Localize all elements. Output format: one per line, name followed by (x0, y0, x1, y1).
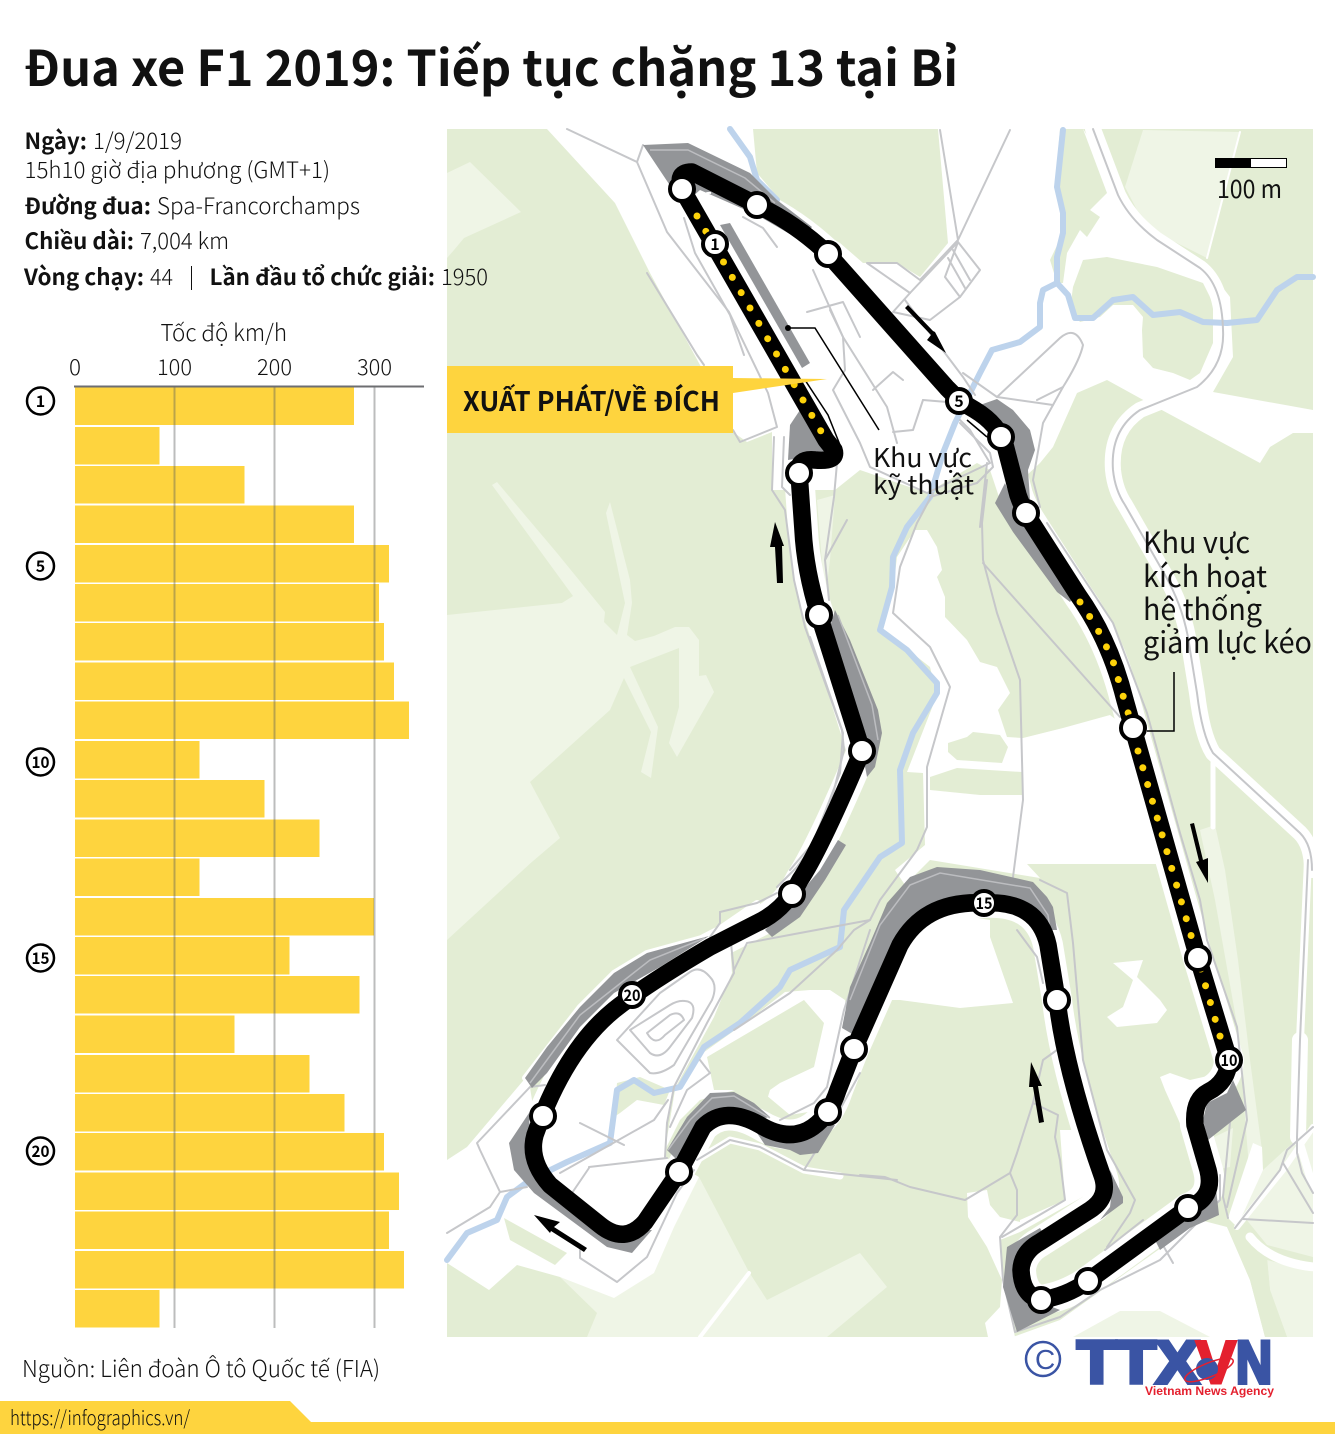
logo: TTXVN: V (1196, 1329, 1236, 1396)
race info: Ngày: (24, 124, 87, 156)
turn markers (531, 177, 1241, 1312)
race info: Đường đua: (24, 189, 151, 221)
title: Đua xe F1 2019: Tiếp tục chặng 13 tại Bỉ (24, 30, 958, 101)
axis ticks: 100 (157, 350, 192, 382)
callout: DRS zone: giảm lực kéo (1143, 620, 1312, 662)
logo: TTXVN: Vietnam News Agency (1145, 1384, 1274, 1398)
footer bar with URL (0, 1401, 1335, 1434)
axis ticks: 300 (357, 350, 392, 382)
road halos (525, 129, 1313, 1300)
turn markers: 15 (976, 890, 992, 914)
race info: 44 (150, 260, 173, 292)
bar chart: speed by corner (27, 314, 424, 1328)
callout: start/finish (447, 366, 827, 433)
scale bar: 100 m (1217, 170, 1282, 206)
race info: Spa-Francorchamps (157, 189, 360, 221)
DRS yellow dots (697, 216, 1222, 1043)
race info: Lần đầu tổ chức giải: (210, 260, 435, 292)
turn markers: 20 (624, 982, 640, 1006)
callout: DRS zone: hệ thống (1143, 587, 1262, 629)
footer bar with URL: https://infographics.vn/ (10, 1402, 190, 1431)
corner number markers: 10 (32, 749, 50, 773)
chart heading: Tốc độ km/h (160, 314, 287, 348)
race info: 1950 (441, 260, 488, 292)
race info: 1/9/2019 (93, 124, 182, 156)
callout: technical zone: kỹ thuật (873, 465, 974, 502)
callout: technical zone (785, 325, 974, 502)
race info: Vòng chạy: (23, 260, 144, 292)
race info (23, 124, 488, 292)
corner number markers: 15 (32, 945, 50, 969)
run-off areas (509, 143, 1246, 1332)
corner number markers: 5 (36, 553, 45, 577)
axis ticks: 0 (69, 350, 81, 382)
axis ticks (69, 350, 392, 382)
callout: start/finish: XUẤT PHÁT/VỀ ĐÍCH (463, 380, 720, 419)
grid lines (174, 386, 374, 1328)
logo: TTXVN (1026, 1329, 1274, 1398)
roads (447, 129, 1313, 1332)
corner number markers: 20 (32, 1138, 50, 1162)
callout: DRS zone: kích hoạt (1143, 554, 1267, 596)
callout: DRS zone: Khu vực (1143, 520, 1250, 562)
source: Nguồn: Liên đoàn Ô tô Quốc tế (FIA) (22, 1350, 380, 1384)
race info: 7,004 km (140, 224, 229, 256)
turn markers: 1 (710, 231, 720, 255)
turn markers: 5 (954, 388, 964, 412)
race info: 15h10 giờ địa phương (GMT+1) (24, 153, 330, 185)
turn markers: 10 (1220, 1047, 1238, 1071)
bars (75, 388, 409, 1328)
race info: Chiều dài: (24, 224, 134, 256)
corner number markers (27, 388, 54, 1164)
axis ticks: 200 (257, 350, 292, 382)
logo: TTXVN: C (1035, 1344, 1055, 1375)
direction arrows (534, 305, 1208, 1252)
corner number markers: 1 (36, 388, 45, 412)
callout: DRS zone (1143, 520, 1312, 731)
river (447, 129, 1313, 1260)
panel: circuit map (447, 129, 1313, 1337)
race track (533, 172, 1229, 1300)
callout: technical zone: Khu vực (873, 438, 972, 475)
logo: TTXVN: TTX (1077, 1329, 1199, 1396)
logo: TTXVN: N (1236, 1329, 1272, 1396)
